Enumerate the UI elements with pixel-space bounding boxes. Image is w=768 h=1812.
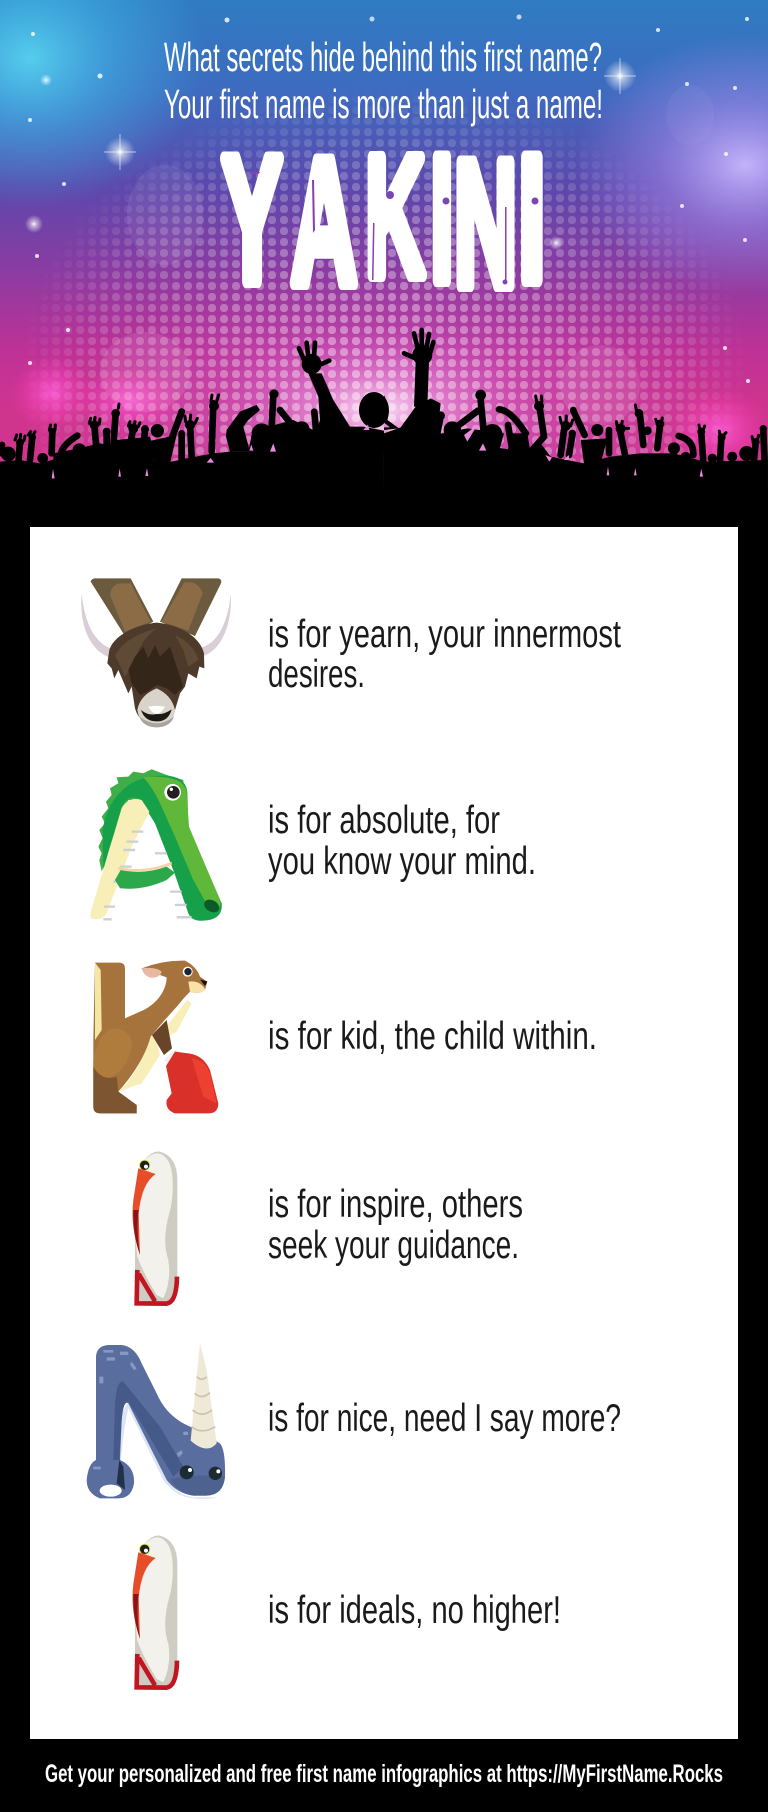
stage glows	[0, 0, 768, 560]
icon: yak letter Y	[81, 578, 231, 727]
right torso shapes	[384, 362, 607, 463]
name letters: A	[291, 122, 357, 321]
heading lines	[164, 34, 603, 127]
right heads	[412, 345, 754, 463]
crowd silhouette	[0, 330, 768, 490]
left hand palms	[16, 401, 219, 447]
name letters: I	[518, 119, 545, 318]
right big hand fingers	[404, 330, 433, 358]
name letters: Y	[222, 120, 282, 319]
right body mass	[384, 398, 768, 490]
left heads	[1, 354, 389, 464]
right hand palms	[436, 401, 767, 446]
icon: narwhal letter N	[87, 1343, 225, 1499]
left lit gaps	[52, 425, 369, 478]
distress holes	[386, 191, 538, 284]
dot grid	[40, 100, 730, 464]
name letters	[222, 119, 545, 323]
crowd left half	[0, 343, 389, 490]
left big hand fingers	[299, 343, 329, 365]
text: K row: is for kid, the child within.	[268, 1015, 597, 1058]
text: A row line 1: is for absolute, for	[268, 799, 500, 842]
text: N row: is for nice, need I say more?	[268, 1397, 621, 1440]
crowd right half	[384, 330, 768, 490]
row: N	[87, 1343, 621, 1499]
left torso shapes	[53, 373, 384, 463]
text: I row line 2: seek your guidance.	[268, 1224, 519, 1267]
text: second I row: is for ideals, no higher!	[268, 1589, 561, 1632]
icon: stork letter I second	[132, 1535, 177, 1689]
header banner	[0, 0, 768, 488]
name letters: I	[430, 119, 453, 318]
row: Y	[81, 578, 621, 727]
name letters: K	[366, 122, 424, 312]
right arms	[437, 400, 765, 462]
row: K	[93, 961, 597, 1113]
text: I row line 1: is for inspire, others	[268, 1183, 523, 1226]
icon: kangaroo letter K	[93, 961, 218, 1113]
lower black band	[0, 488, 768, 527]
icon: crocodile letter A	[91, 769, 222, 921]
right fingers	[536, 396, 759, 442]
row: I	[132, 1151, 523, 1305]
left body mass	[0, 433, 384, 490]
text: A row line 2: you know your mind.	[268, 840, 536, 883]
name letters: N	[454, 124, 517, 323]
distress marks	[250, 172, 506, 280]
sparkles	[25, 14, 750, 383]
name title	[222, 119, 545, 323]
row: I second	[132, 1535, 561, 1689]
row: A	[91, 769, 536, 921]
left fingers	[15, 395, 219, 441]
icon: stork letter I	[132, 1151, 177, 1305]
right lit gaps	[384, 423, 703, 477]
text: Y row line 1: is for yearn, your innermost	[268, 613, 621, 656]
white content panel	[30, 527, 738, 1739]
text: Y row line 2: desires.	[268, 653, 365, 696]
left arms	[2, 395, 317, 463]
stage gradient	[0, 0, 768, 490]
